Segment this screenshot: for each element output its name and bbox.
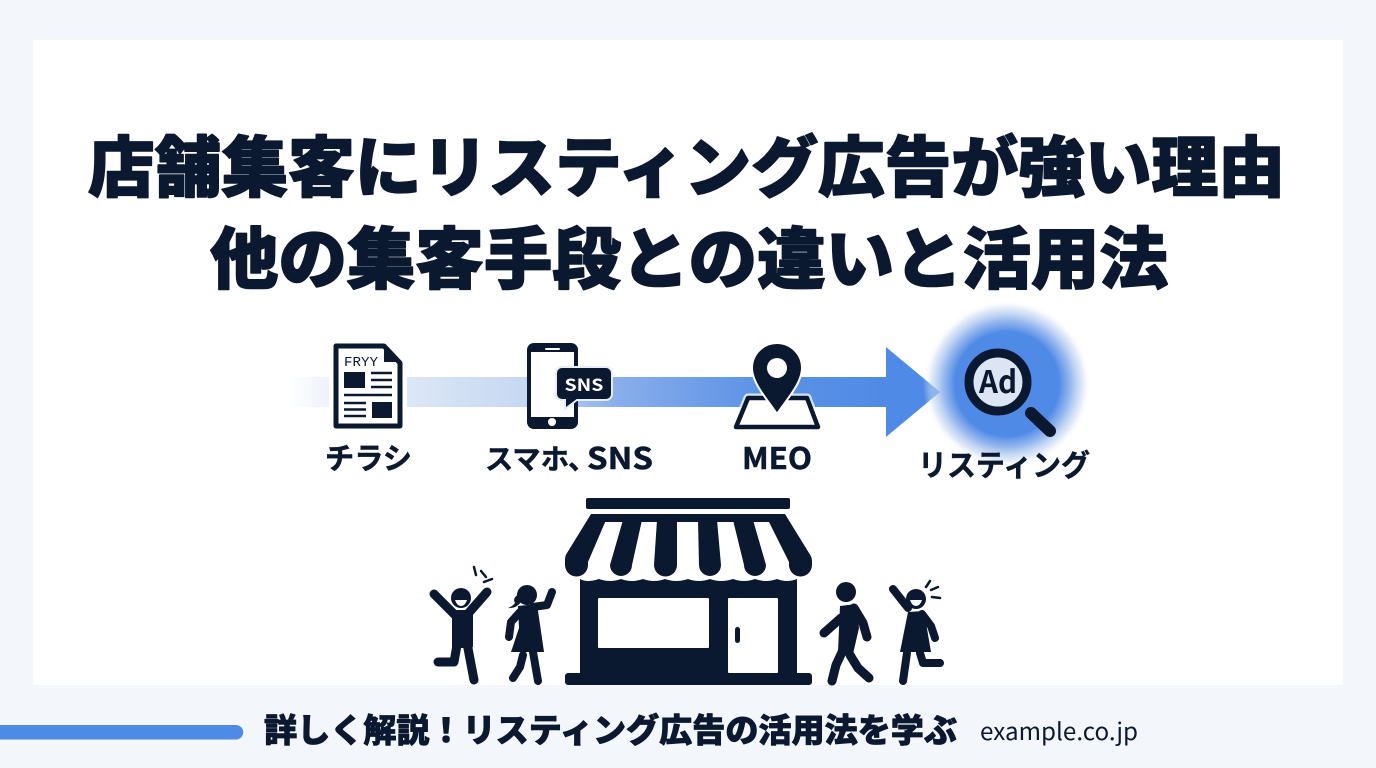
label: smartphone and SNS: 、 <box>568 438 596 478</box>
person: cheering man <box>434 567 492 680</box>
icon: glowing magnifier with Ad <box>923 300 1091 468</box>
person: waving woman <box>508 585 552 681</box>
label: listing: リスティング <box>918 441 1090 485</box>
label: flyer: チラシ <box>325 434 412 478</box>
icon: glowing magnifier with Ad: Ad <box>978 357 1017 402</box>
icon: map pin <box>736 343 818 427</box>
icon: flyer <box>333 343 403 429</box>
white main panel <box>33 40 1343 685</box>
label: MEO: MEO <box>742 434 812 478</box>
person: walking man <box>824 582 869 681</box>
person: cheering woman <box>893 581 940 681</box>
icon: smartphone with SNS bubble: SNS <box>564 371 604 396</box>
label: smartphone and SNS: SNS <box>587 434 653 478</box>
store <box>565 498 812 685</box>
progression arrow <box>290 347 940 437</box>
footer call to action: 詳しく解説！リスティング広告の活用法を学ぶ <box>264 704 957 752</box>
icon: smartphone with SNS bubble <box>527 343 612 429</box>
title <box>88 115 1285 303</box>
title: 他の集客手段との違いと活用法 <box>210 206 1168 303</box>
icon: flyer: FRYY <box>344 355 379 371</box>
footer URL: example.co.jp <box>980 712 1138 747</box>
title: 店舗集客にリスティング広告が強い理由 <box>88 115 1285 211</box>
label: smartphone and SNS: スマホ <box>485 438 569 478</box>
footer accent bar <box>0 725 243 740</box>
